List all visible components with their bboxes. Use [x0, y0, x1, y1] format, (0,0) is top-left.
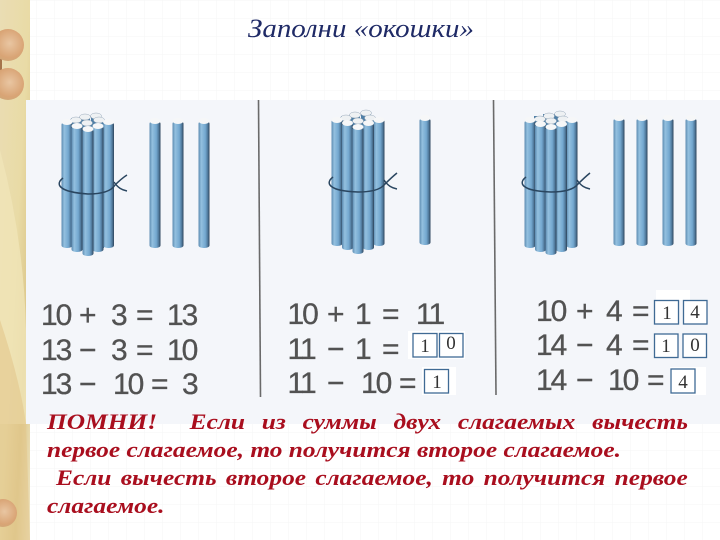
title: Заполни «окошки» [248, 14, 474, 43]
panel 3 equations [536, 295, 664, 397]
rule text: ПОМНИ: первое слагаемое, то получится второе слагаемое. [47, 437, 621, 462]
panel 2 equations: 10 [361, 367, 392, 400]
panel 1 equations: = [136, 334, 153, 367]
panel 2 equations: = [382, 298, 399, 331]
panel 1 equations: − [79, 368, 96, 401]
panel 1 rods: bundle and three single rods [59, 113, 210, 256]
panel 1 equations: 10 [113, 368, 144, 401]
panel 1 equations: = [151, 368, 168, 401]
panel 1 equations: 13 [41, 334, 72, 367]
panel 2 equations: 10 [288, 298, 318, 331]
answer digits: 0 [446, 333, 456, 354]
panel 2 equations [288, 298, 444, 400]
answer digits: 0 [690, 335, 700, 356]
panel 3 equations: = [632, 329, 649, 362]
panel 3 equations: + [576, 295, 593, 328]
panel 3 equations: 14 [536, 329, 567, 362]
left decorative band [0, 0, 30, 540]
panel 2 equations: 11 [288, 333, 316, 366]
panel 2 equations: + [327, 298, 344, 331]
white patches behind answer windows [408, 290, 706, 395]
textbook picture panel [26, 100, 720, 424]
panel 1 equations: 10 [167, 334, 198, 367]
panel 1 equations: 13 [167, 299, 198, 332]
answer digits [420, 302, 700, 393]
panel 1 equations: − [79, 334, 96, 367]
panel 1 equations: + [79, 299, 96, 332]
rule text: ПОМНИ: слагаемое. [47, 493, 165, 518]
rule text: ПОМНИ [46, 409, 688, 518]
panel 3 equations: 10 [536, 295, 567, 328]
answer windows [413, 300, 707, 393]
answer digits: 1 [661, 336, 671, 357]
panel 2 equations: 11 [288, 367, 316, 400]
panel 1 equations: 13 [41, 368, 72, 401]
panel 2 equations: − [327, 367, 344, 400]
rule text: ПОМНИ: ПОМНИ! [47, 409, 157, 434]
panel 3 equations: = [647, 364, 664, 397]
panel 3 equations: 14 [536, 364, 567, 397]
panel 2 equations: 1 [355, 298, 371, 331]
answer digits: 4 [678, 372, 688, 393]
panel 1 equations [41, 299, 198, 401]
panel 2 equations: 1 [355, 333, 371, 366]
panel 2 equations: − [327, 333, 344, 366]
panel 2 equations: = [382, 333, 399, 366]
answer digits: 1 [420, 336, 430, 357]
rule text: ПОМНИ: Если вычесть второе слагаемое, то получится первое [56, 465, 688, 490]
panel 3 equations: 4 [606, 329, 622, 362]
answer digits: 4 [690, 302, 700, 323]
answer digits: 1 [432, 372, 442, 393]
panel 2 rods: bundle and one single rod [329, 110, 430, 254]
dividers [258, 100, 496, 397]
panel 1 equations: 3 [111, 334, 127, 367]
panel 3 equations: − [576, 364, 593, 397]
panel 2 equations: 11 [416, 298, 444, 331]
panel 1 equations: 10 [41, 299, 72, 332]
panel 3 equations: = [632, 295, 649, 328]
panel 1 equations: 3 [182, 368, 198, 401]
answer digits: 1 [662, 303, 672, 324]
panel 3 rods: bundle and four single rods [522, 111, 696, 255]
panel 3 equations: 10 [608, 364, 639, 397]
rule text: ПОМНИ: Если из суммы двух слагаемых вычесть [190, 409, 688, 434]
panel 3 equations: 4 [606, 295, 622, 328]
panel 1 equations: 3 [111, 299, 127, 332]
panel 3 equations: − [576, 329, 593, 362]
panel 1 equations: = [136, 299, 153, 332]
icon: beads [0, 29, 24, 527]
panel 2 equations: = [399, 367, 416, 400]
